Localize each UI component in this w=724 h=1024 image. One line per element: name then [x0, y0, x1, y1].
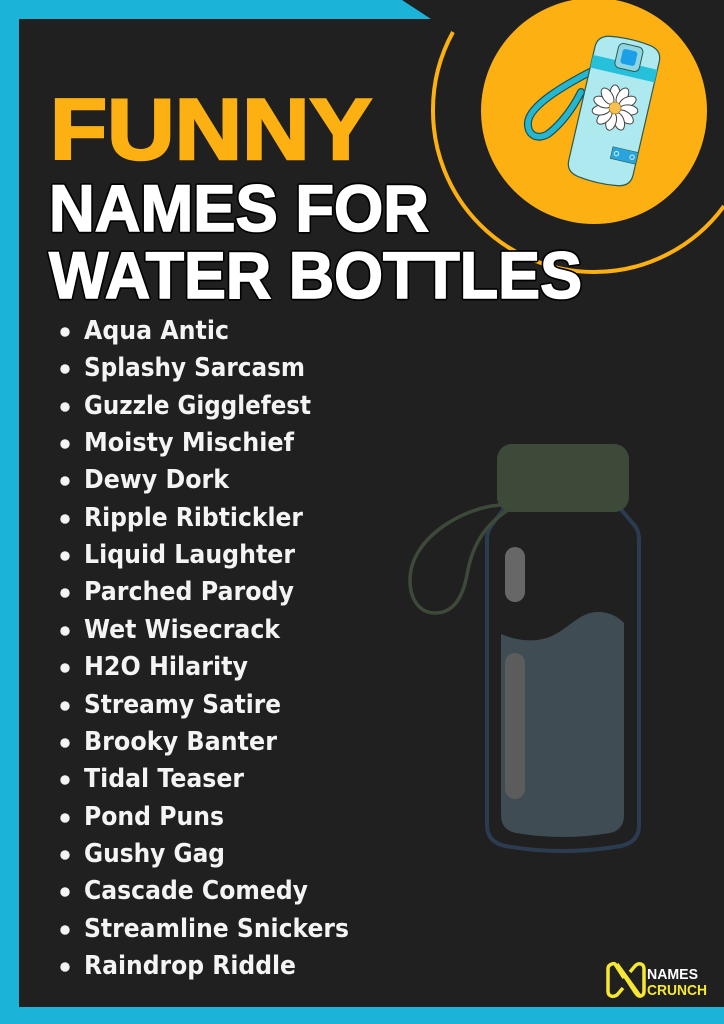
bullet list of names: Moisty Mischief	[84, 428, 295, 458]
bullet list of names: Streamy Satire	[84, 690, 281, 720]
bullet list of names: Liquid Laughter	[84, 540, 295, 570]
faded background bottle illustration	[410, 444, 639, 851]
faded bottle outline	[487, 507, 639, 851]
daisy flower	[592, 85, 638, 131]
bullet list of names: Guzzle Gigglefest	[84, 391, 311, 421]
bullet list of names: Streamline Snickers	[84, 914, 349, 944]
bottle body	[565, 32, 663, 190]
bullet list of names: Cascade Comedy	[84, 876, 308, 906]
faded strap	[410, 505, 508, 613]
bullet list of names: Tidal Teaser	[84, 764, 244, 794]
faded cap	[497, 444, 629, 512]
bullet list of names: Dewy Dork	[84, 465, 230, 495]
bullet list of names: Aqua Antic	[84, 316, 229, 346]
title	[49, 82, 582, 312]
logo text: NAMES	[647, 966, 698, 983]
faded highlights	[505, 547, 525, 799]
title: NAMES FOR: NAMES FOR	[49, 171, 429, 245]
bullet list of names	[60, 316, 349, 981]
faded water	[501, 612, 624, 837]
orange ring	[433, 32, 724, 272]
bottle strap	[528, 72, 590, 137]
bullet list of names: Pond Puns	[84, 802, 224, 832]
bullet list of names: Raindrop Riddle	[84, 951, 296, 981]
bullet list of names: Brooky Banter	[84, 727, 277, 757]
title: WATER BOTTLES: WATER BOTTLES	[49, 238, 582, 312]
title: WATER BOTTLES: WATER BOTTLES	[49, 238, 582, 312]
orange circle	[481, 0, 707, 224]
bullet list of names: H2O Hilarity	[84, 652, 248, 682]
icon: blue water bottle with daisy	[528, 32, 663, 190]
logo text: CRUNCH	[647, 982, 707, 999]
bullet list of names: Gushy Gag	[84, 839, 225, 869]
logo icon	[608, 964, 644, 996]
bullet list of names: Splashy Sarcasm	[84, 353, 305, 383]
bullet list of names: Parched Parody	[84, 577, 294, 607]
logo: Names Crunch	[608, 964, 707, 999]
bullet list of names: Wet Wisecrack	[84, 615, 281, 645]
logo text	[647, 966, 707, 999]
title: FUNNY: FUNNY	[50, 82, 372, 178]
bullet list of names: Ripple Ribtickler	[84, 503, 303, 533]
title: NAMES FOR: NAMES FOR	[49, 171, 429, 245]
